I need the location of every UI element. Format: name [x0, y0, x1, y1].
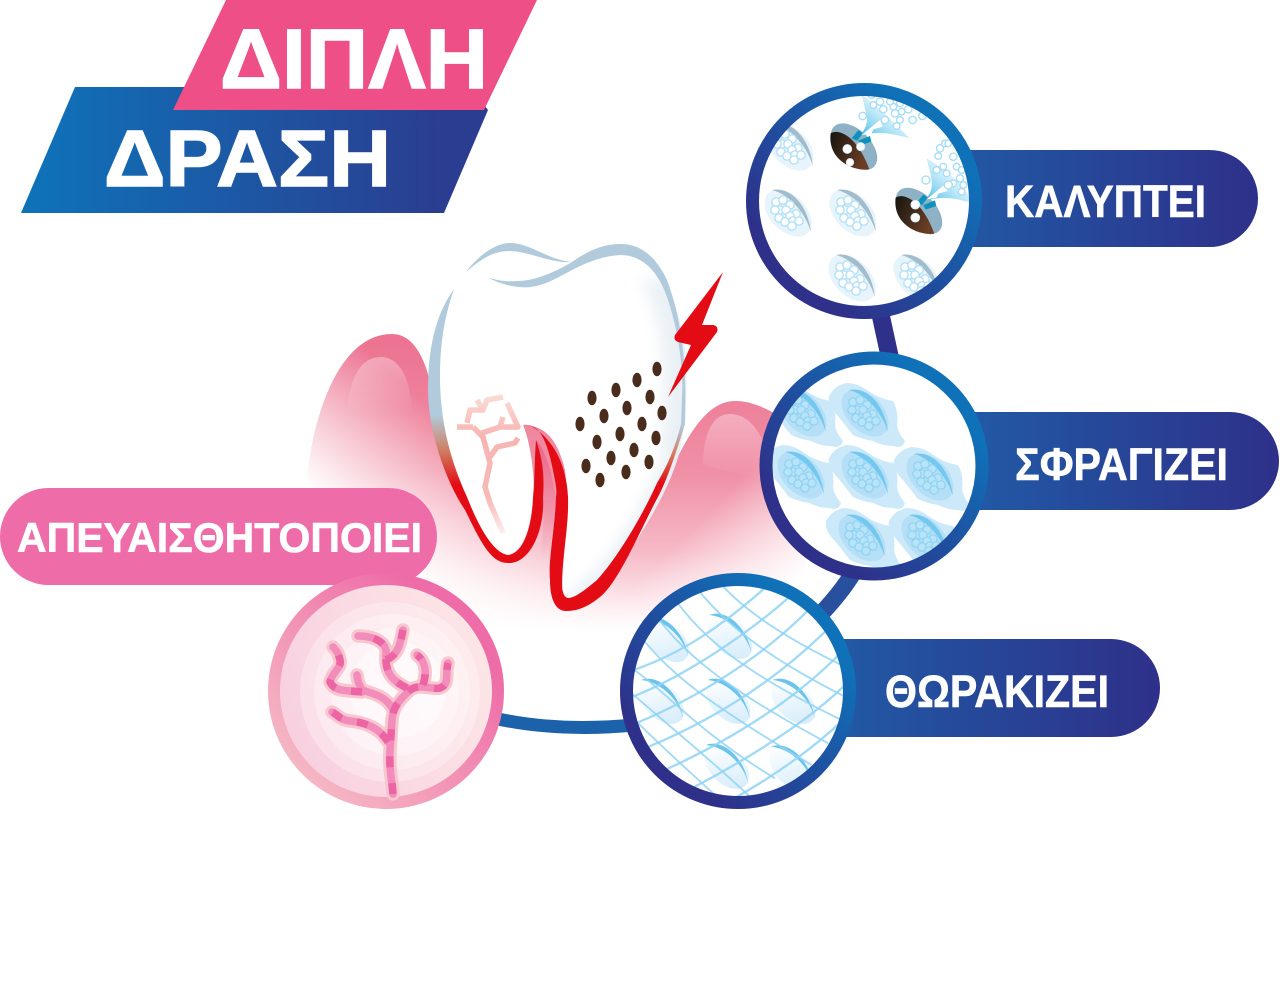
tooth outline: left side and root: [428, 289, 508, 563]
tooth outline: left root red edge: [507, 440, 544, 563]
mesh lines: rising family: [628, 585, 852, 802]
open tubule with plug: lower: [895, 139, 969, 234]
circle: seals, coated tubules: [765, 358, 982, 574]
title band: pink: [173, 0, 537, 110]
pill: desensitizes: ΑΠΕΥΑΙΣΘΗΤΟΠΟΙΕΙ: [17, 514, 422, 561]
ring: [766, 358, 982, 574]
tooth body: [440, 254, 686, 599]
circle: shields, protective mesh: [626, 580, 852, 802]
mesh lines: falling family: [632, 585, 848, 798]
title: [21, 0, 537, 213]
connector lines: [498, 312, 890, 727]
tooth: [428, 243, 723, 620]
tooth outline: right root fade: [657, 424, 685, 493]
nerve branches: [457, 397, 518, 533]
pill: shields: [740, 639, 1160, 737]
dentine tubules dots: [575, 362, 667, 487]
gum highlight: left: [347, 357, 412, 412]
pill: seals: ΣΦΡΑΓΙΖΕΙ: [1015, 439, 1228, 490]
pill: desensitizes: [0, 488, 437, 585]
pill: seals: [880, 412, 1279, 510]
gum highlight: right: [703, 414, 764, 480]
title line 2: ΔΡΑΣΗ: [104, 114, 391, 203]
tooth outline: right root red gumline: [523, 425, 660, 611]
tooth outline: right crown: [487, 244, 685, 425]
pill: covers: ΚΑΛΥΠΤΕΙ: [1005, 176, 1206, 227]
nerve tree: [330, 630, 448, 794]
title line 1: ΔΙΠΛΗ: [220, 12, 488, 106]
tooth outline: top left cusp: [466, 243, 572, 272]
circle: covers, tubules with bubbles: [752, 90, 976, 312]
pill: shields: ΘΩΡΑΚΙΖΕΙ: [885, 666, 1109, 717]
ring: [752, 90, 976, 312]
pill: covers: [860, 150, 1258, 247]
icon: lightning bolt: [668, 272, 723, 397]
tooth shading: [568, 278, 686, 598]
circle: desensitizes, nerve: [268, 573, 504, 809]
open tubule with plug: upper: [830, 96, 926, 170]
ring: [626, 580, 850, 802]
gums: [306, 334, 810, 640]
title band: blue: [21, 87, 488, 213]
gum strip between roots: [536, 440, 556, 560]
